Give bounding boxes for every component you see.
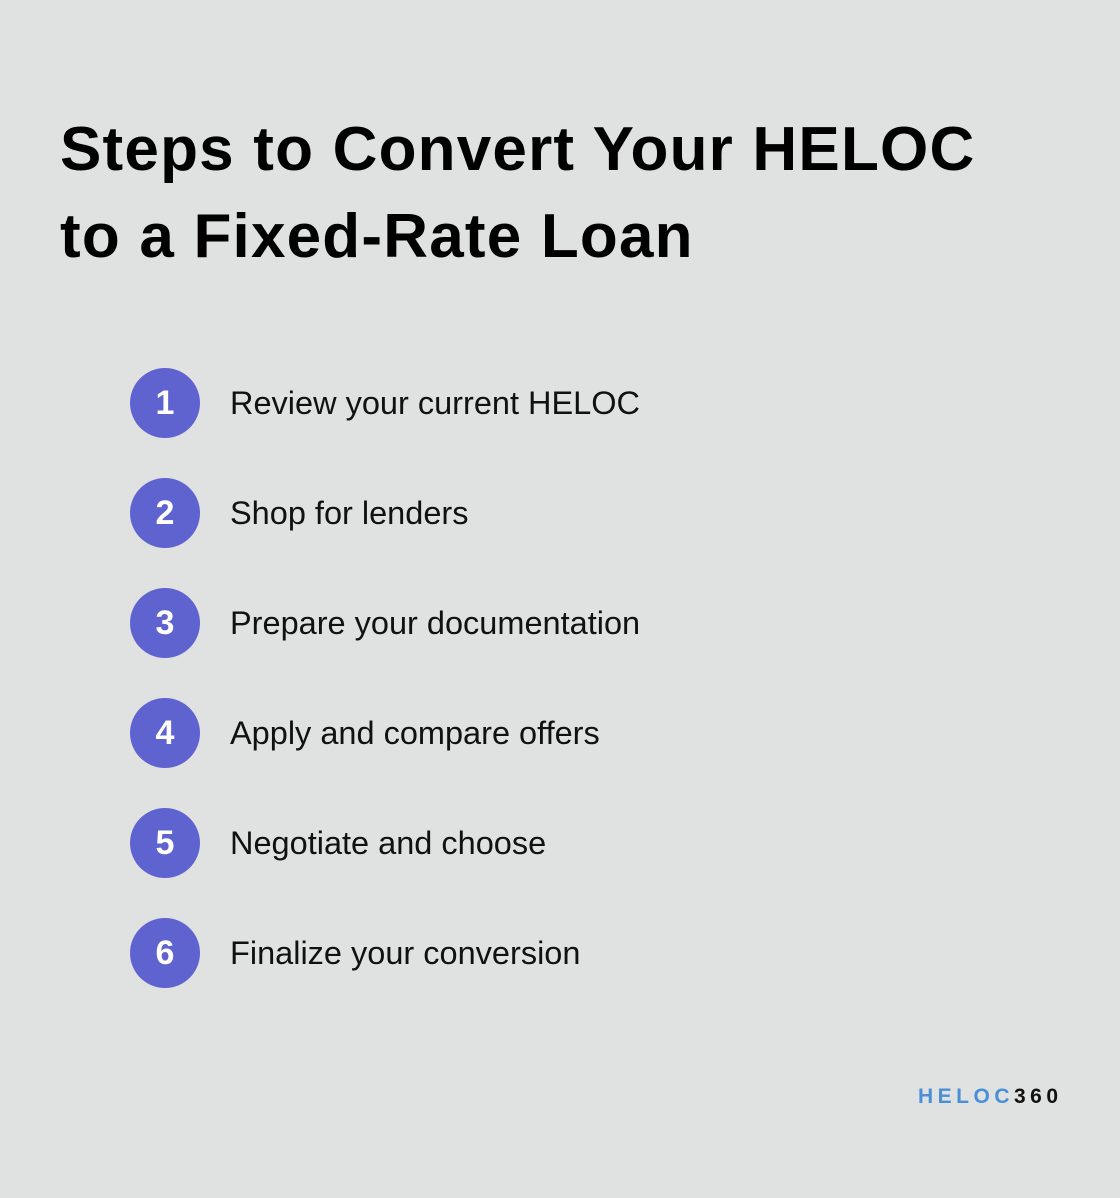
title: [60, 115, 975, 271]
step 1: Review your current HELOC: [230, 385, 640, 421]
step 2: [130, 478, 468, 548]
step 5: 5: [156, 824, 174, 862]
title: Steps to Convert Your HELOC: [60, 115, 975, 184]
step 6: [130, 918, 580, 988]
step 4: Apply and compare offers: [230, 715, 600, 751]
step 4: [130, 698, 600, 768]
step 6: 6: [156, 934, 174, 972]
step 5: [130, 808, 546, 878]
step 3: Prepare your documentation: [230, 605, 640, 641]
step 1: 1: [156, 384, 174, 422]
step 5: Negotiate and choose: [230, 825, 546, 861]
logo: HELOC360: [918, 1085, 1063, 1108]
step 3: 3: [156, 604, 174, 642]
step 3: [130, 588, 640, 658]
step 6: Finalize your conversion: [230, 935, 580, 971]
step 4: 4: [156, 714, 174, 752]
step 2: 2: [156, 494, 174, 532]
step 2: Shop for lenders: [230, 495, 468, 531]
title: to a Fixed-Rate Loan: [60, 202, 694, 271]
step 1: [130, 368, 640, 438]
